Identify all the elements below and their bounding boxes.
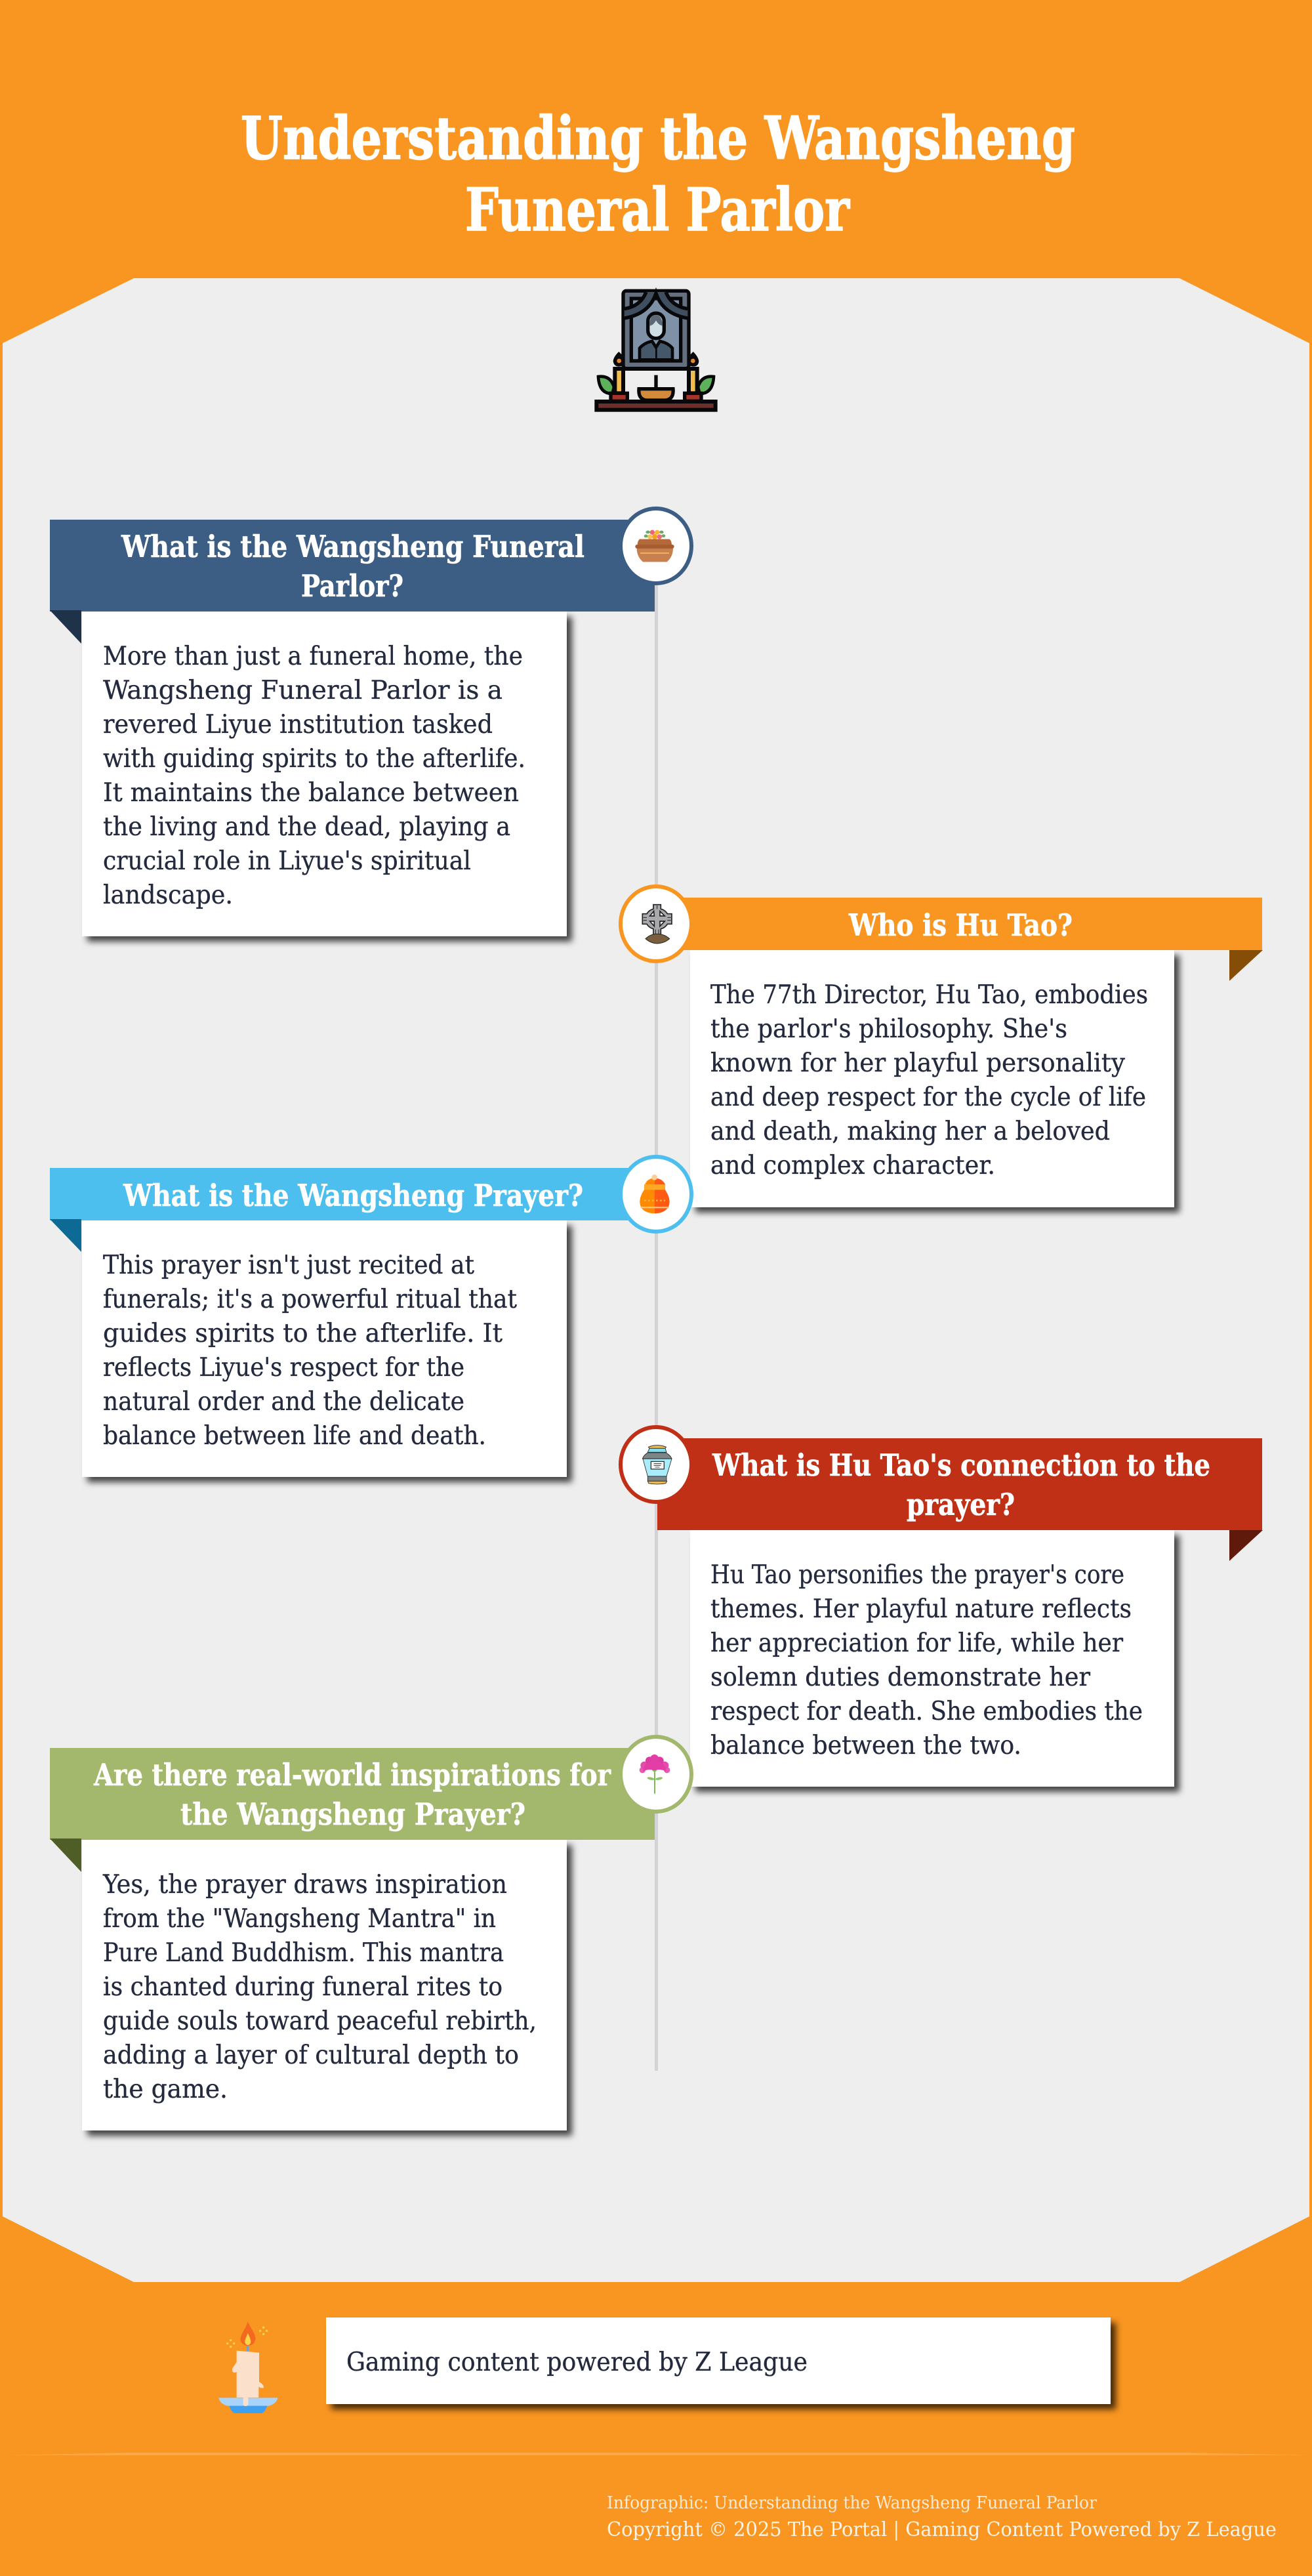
icon: pink carnation in ring — [621, 1737, 691, 1812]
footer credits: Copyright © 2025 The Portal | Gaming Content Powered by Z League — [607, 2518, 1277, 2541]
banner 2 — [657, 898, 1262, 950]
icon: funeral altar — [596, 291, 716, 410]
card 2 body: and complex character. — [710, 1151, 995, 1180]
footer divider — [7, 2453, 1309, 2455]
card 2 body: The 77th Director, Hu Tao, embodies — [710, 980, 1148, 1010]
ribbon fold 3 — [50, 1219, 81, 1252]
card 1 body: Wangsheng Funeral Parlor is a — [103, 676, 502, 705]
section 2: Who is Hu Tao — [621, 886, 1263, 1207]
card 1 body: More than just a funeral home, the — [103, 642, 523, 671]
banner 4 — [657, 1438, 1262, 1530]
card 4 body: themes. Her playful nature reflects — [710, 1594, 1132, 1624]
card 4 body: solemn duties demonstrate her — [710, 1663, 1090, 1692]
card 1 body: landscape. — [103, 881, 233, 910]
section 1: What is the Wangsheng Funeral Parlor — [50, 509, 691, 936]
card 2 body: and deep respect for the cycle of life — [710, 1083, 1146, 1112]
icon: orange bell in ring — [621, 1157, 691, 1232]
card 3 body: reflects Liyue's respect for the — [103, 1353, 464, 1382]
icon: flower urn in ring — [621, 509, 691, 583]
card 4 body: her appreciation for life, while her — [710, 1629, 1123, 1658]
card 2 body — [690, 950, 1174, 1207]
banner 4: prayer? — [907, 1487, 1015, 1522]
card 1 body — [82, 612, 567, 936]
section 3: What is the Wangsheng Prayer — [50, 1157, 691, 1477]
card 5 body: the game. — [103, 2075, 228, 2104]
card 3 body: balance between life and death. — [103, 1421, 486, 1451]
banner 2: Who is Hu Tao? — [848, 907, 1073, 943]
footer credits: Infographic: Understanding the Wangsheng Funeral Parlor — [607, 2493, 1097, 2513]
title: Funeral Parlor — [465, 175, 850, 245]
section 4: Hu Tao's connection to the prayer — [621, 1427, 1263, 1787]
card 2 body: known for her playful personality — [710, 1049, 1125, 1078]
card 5 body: adding a layer of cultural depth to — [103, 2041, 519, 2070]
banner 3: What is the Wangsheng Prayer? — [123, 1178, 583, 1213]
ribbon fold 5 — [50, 1839, 81, 1872]
timeline line — [655, 546, 658, 2071]
card 3 body: natural order and the delicate — [103, 1387, 464, 1417]
banner 4: What is Hu Tao's connection to the — [712, 1447, 1210, 1483]
card 3 body: This prayer isn't just recited at — [103, 1251, 474, 1280]
ribbon fold 2 — [1229, 950, 1263, 981]
footer credits — [607, 2493, 1277, 2541]
card 4 body: respect for death. She embodies the — [710, 1697, 1143, 1726]
banner 5 — [50, 1748, 655, 1840]
card 5 body: is chanted during funeral rites to — [103, 1972, 502, 2002]
card 5 body: Pure Land Buddhism. This mantra — [103, 1938, 504, 1968]
card 1 body: It maintains the balance between — [103, 778, 519, 808]
banner 3 — [50, 1168, 655, 1220]
card 5 body: guide souls toward peaceful rebirth, — [103, 2006, 537, 2036]
icon: candle — [218, 2321, 277, 2413]
section 5: Real-world inspirations — [50, 1737, 691, 2130]
card 1 body: with guiding spirits to the afterlife. — [103, 744, 525, 774]
card 4 body: balance between the two. — [710, 1731, 1021, 1760]
title: Understanding the Wangsheng — [241, 104, 1075, 173]
card 4 body: Hu Tao personifies the prayer's core — [710, 1560, 1124, 1590]
banner 1 — [50, 520, 655, 612]
banner 1: What is the Wangsheng Funeral — [121, 529, 584, 564]
banner 5: the Wangsheng Prayer? — [180, 1797, 525, 1832]
card 3 body: guides spirits to the afterlife. It — [103, 1319, 502, 1348]
card 2 body: and death, making her a beloved — [710, 1117, 1110, 1146]
card 3 body: funerals; it's a powerful ritual that — [103, 1285, 517, 1314]
card 1 body: revered Liyue institution tasked — [103, 710, 493, 739]
card 2 body: the parlor's philosophy. She's — [710, 1014, 1067, 1044]
banner 5: Are there real-world inspirations for — [93, 1757, 611, 1793]
card 1 body: the living and the dead, playing a — [103, 812, 510, 842]
card 4 body — [690, 1530, 1174, 1787]
icon: celtic cross in ring — [621, 886, 691, 961]
panel: main background — [3, 278, 1309, 2282]
title — [241, 104, 1075, 245]
footer note card: Gaming content powered by Z League — [346, 2348, 808, 2377]
card 5 body: from the "Wangsheng Mantra" in — [103, 1904, 496, 1934]
ribbon fold 1 — [50, 610, 81, 644]
banner 1: Parlor? — [301, 568, 403, 604]
card 1 body: crucial role in Liyue's spiritual — [103, 846, 471, 876]
ribbon fold 4 — [1229, 1530, 1263, 1561]
card 5 body — [82, 1840, 567, 2130]
footer note card — [326, 2317, 1111, 2404]
card 3 body — [82, 1220, 567, 1477]
icon: blue urn in ring — [621, 1427, 691, 1502]
card 5 body: Yes, the prayer draws inspiration — [102, 1870, 507, 1900]
